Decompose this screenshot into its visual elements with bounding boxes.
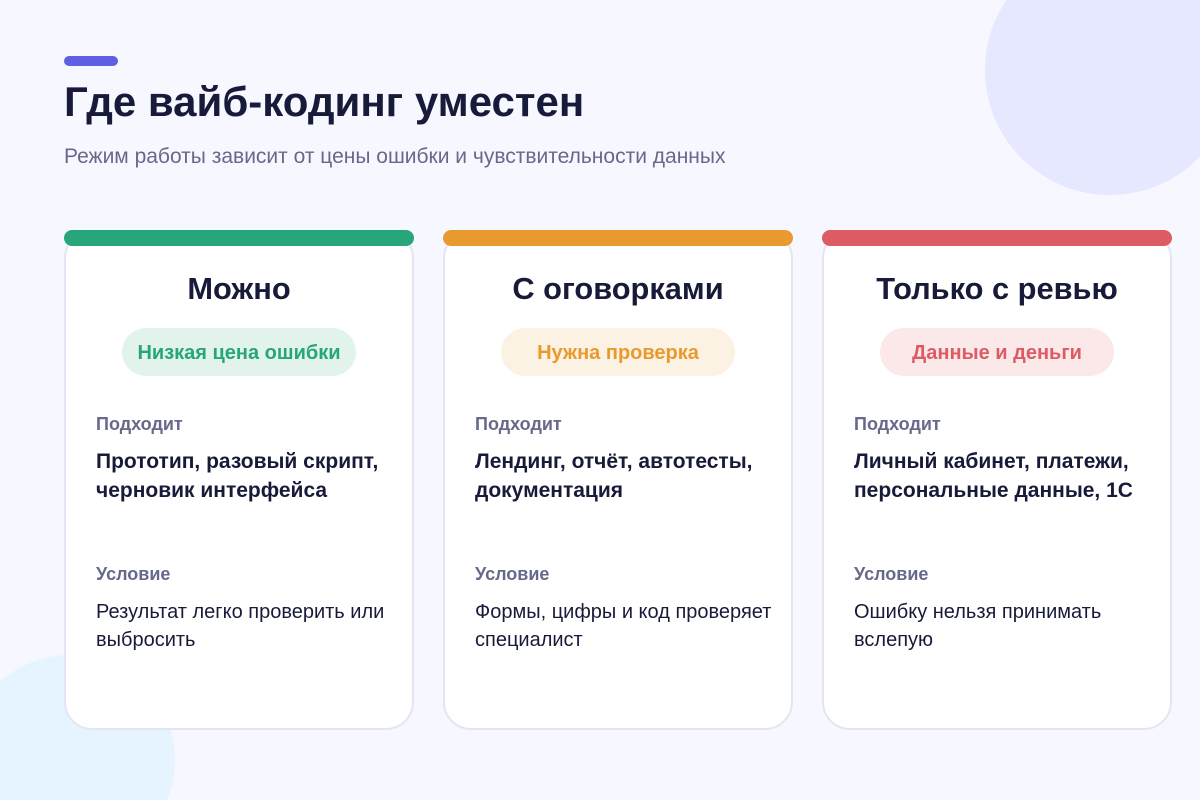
label: fits: Подходит: [854, 414, 941, 434]
badge: data and money: [880, 328, 1114, 376]
text: condition: Формы, цифры и код проверяет: [475, 601, 771, 623]
title accent bar: [64, 56, 118, 66]
text: fits list: Лендинг, отчёт, автотесты,: [475, 450, 752, 473]
text: condition: [96, 601, 384, 651]
text: condition: Ошибку нельзя принимать: [854, 601, 1101, 623]
text: fits list: Личный кабинет, платежи,: [854, 450, 1129, 473]
text: condition: [854, 601, 1101, 651]
panel: С оговорками: [443, 230, 793, 730]
text: fits list: черновик интерфейса: [96, 479, 327, 502]
text: fits list: персональные данные, 1С: [854, 479, 1133, 502]
badge: low error cost: Низкая цена ошибки: [137, 342, 341, 364]
text: condition: выбросить: [96, 629, 195, 651]
text: fits list: [854, 450, 1133, 502]
title: Где вайб-кодинг уместен: [64, 78, 584, 125]
orange top bar: [443, 230, 793, 246]
green top bar: [64, 230, 414, 246]
text: condition: Результат легко проверить или: [96, 601, 384, 623]
badge: review needed: [501, 328, 735, 376]
red top bar: [822, 230, 1172, 246]
decorative circle: top right: [985, 0, 1200, 195]
badge: review needed: Нужна проверка: [537, 342, 699, 364]
text: fits list: документация: [475, 479, 623, 502]
label: condition: Условие: [96, 564, 170, 584]
text: fits list: Прототип, разовый скрипт,: [96, 450, 378, 473]
text: fits list: [475, 450, 752, 502]
text: condition: вслепую: [854, 629, 933, 651]
subtitle: Режим работы зависит от цены ошибки и чувствительности данных: [64, 145, 725, 168]
badge: low error cost: [122, 328, 356, 376]
panel: Только с ревью: [822, 230, 1172, 730]
decorative circle: bottom left: [0, 655, 175, 800]
card heading: Только с ревью: Только с ревью: [876, 271, 1118, 306]
text: condition: специалист: [475, 629, 583, 651]
text: fits list: [96, 450, 378, 502]
card heading: Можно: Можно: [187, 271, 291, 306]
label: condition: Условие: [475, 564, 549, 584]
label: fits: Подходит: [96, 414, 183, 434]
text: condition: [475, 601, 772, 651]
card heading: С оговорками: С оговорками: [512, 271, 724, 306]
label: fits: Подходит: [475, 414, 562, 434]
badge: data and money: Данные и деньги: [912, 342, 1082, 364]
panel: Можно: [64, 230, 414, 730]
label: condition: Условие: [854, 564, 928, 584]
